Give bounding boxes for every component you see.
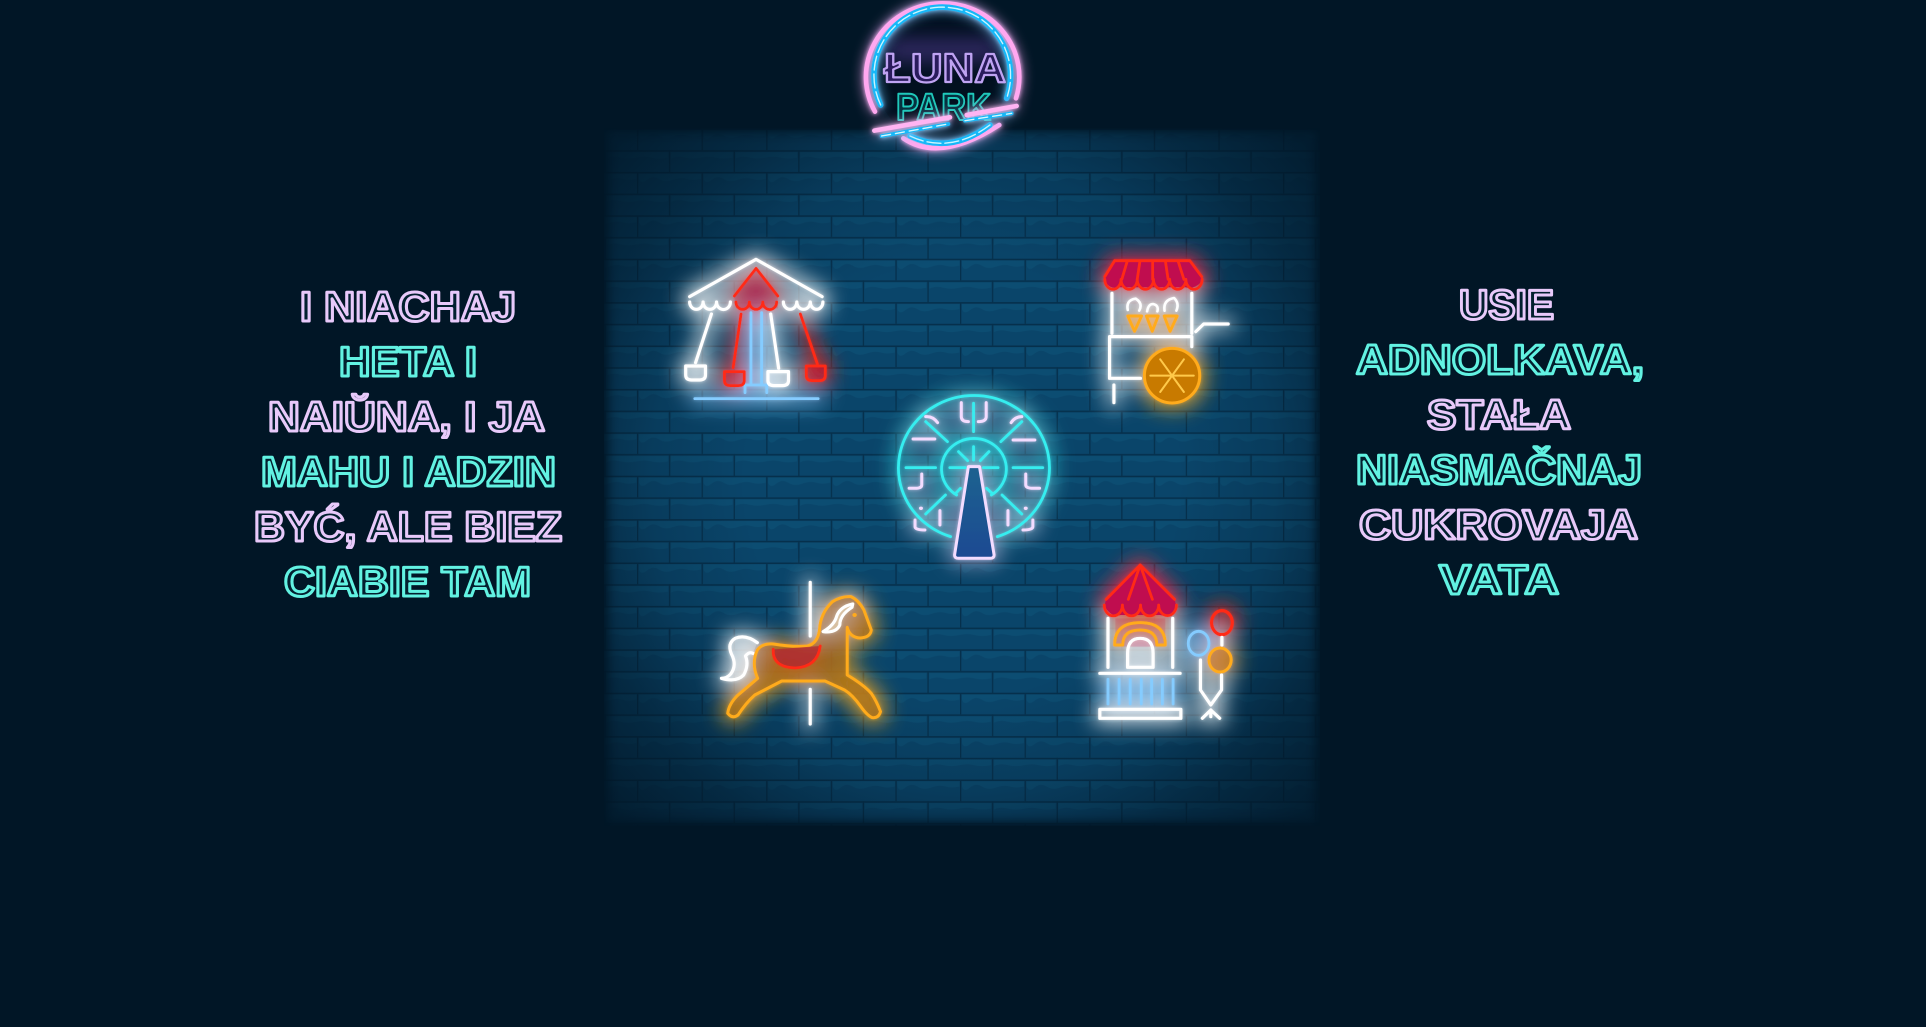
text block: left verse: MAHU I ADZIN xyxy=(261,448,556,495)
icon: ice cream cart xyxy=(1105,261,1228,403)
text block: right verse: USIE xyxy=(1459,281,1554,328)
text block: left verse: BYĆ, ALE BIEZ xyxy=(254,502,562,550)
logo dark disc and purple glow xyxy=(876,10,1008,142)
icon: swing ride xyxy=(686,259,825,399)
text block: left verse: HETA I xyxy=(339,338,477,385)
infographic canvas xyxy=(255,0,1643,826)
icon: carousel horse xyxy=(721,582,880,724)
text block: right verse: STAŁA xyxy=(1427,391,1571,438)
logo word: ŁUNA: ŁUNA xyxy=(884,45,1006,91)
text block: right verse: CUKROVAJA xyxy=(1359,501,1638,548)
text block: left verse: I NIACHAJ xyxy=(300,283,516,330)
text block: left verse: CIABIE TAM xyxy=(284,558,531,605)
text block: right verse: NIASMAČNAJ xyxy=(1356,445,1642,493)
text block: right verse: VATA xyxy=(1439,556,1559,603)
logo: Łuna Park neon sign xyxy=(866,3,1019,148)
logo rings xyxy=(866,3,1019,148)
text block: left verse: NAIŬNA, I JA xyxy=(268,393,545,440)
panel: brick wall xyxy=(604,128,1320,826)
logo word: PARK: PARK xyxy=(896,87,991,129)
text block: left verse xyxy=(254,283,562,605)
icon: ticket booth with balloons xyxy=(1100,565,1232,718)
icon: ferris wheel xyxy=(898,396,1049,558)
text block: right verse: ADNOLKAVA, xyxy=(1356,336,1644,383)
logo slashes over word xyxy=(874,106,1017,136)
text block: right verse xyxy=(1356,281,1644,603)
